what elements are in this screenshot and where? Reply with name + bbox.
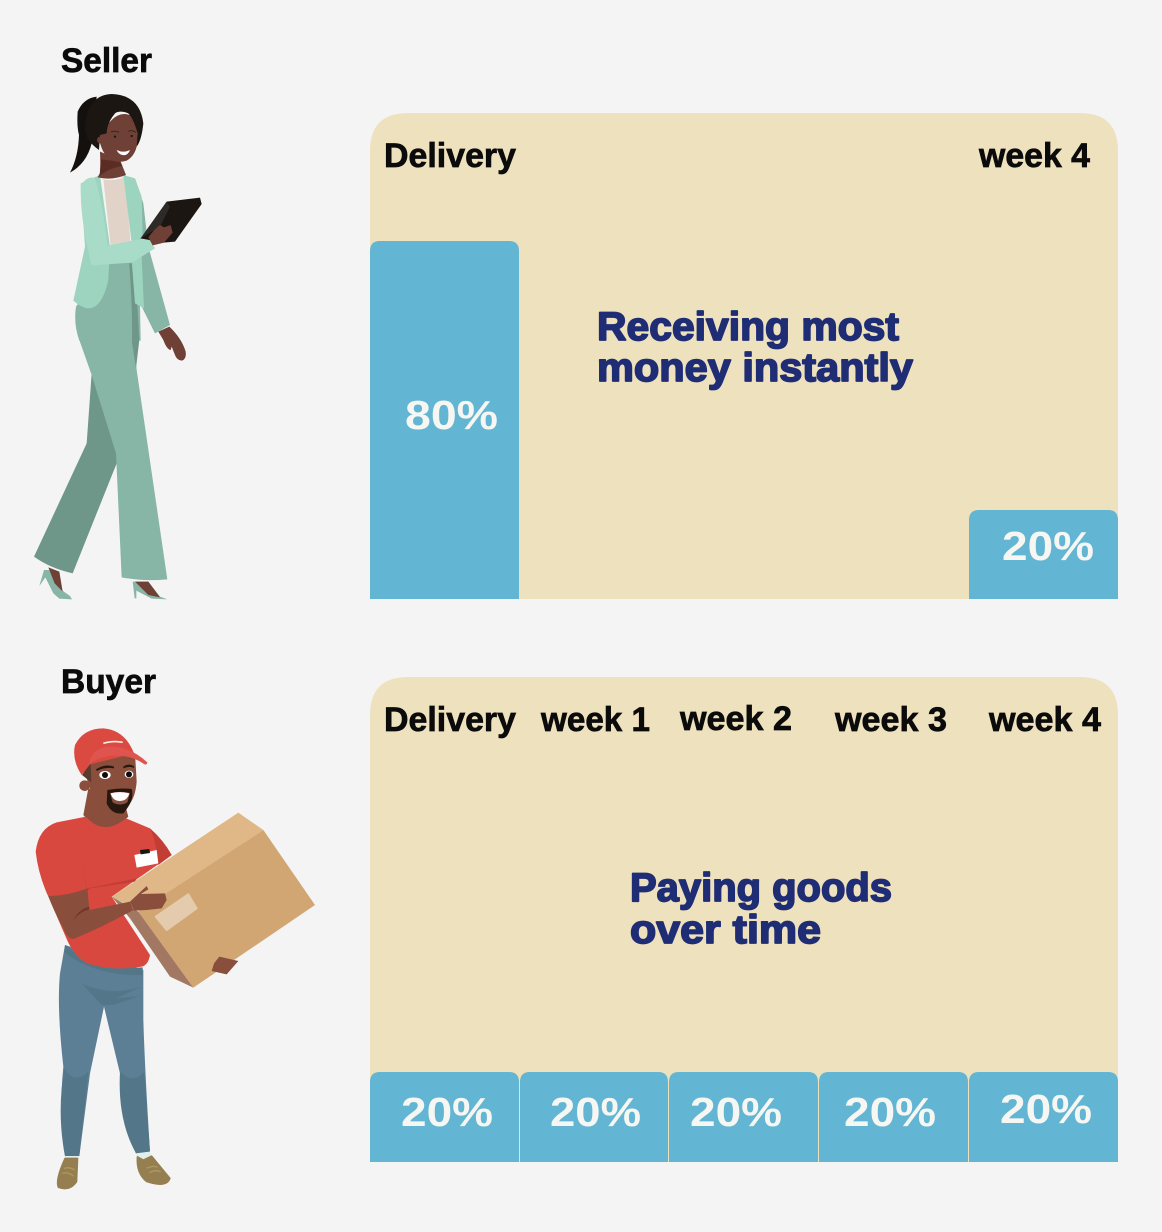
panel: seller payment timeline — [370, 113, 1118, 599]
heading: paying goods over time — [630, 866, 892, 952]
seller upper body — [73, 175, 202, 361]
buyer legs — [57, 945, 170, 1189]
label: week 1: week 1 — [540, 701, 650, 739]
seller legs — [34, 340, 167, 599]
bar: 20% week 3 — [819, 1072, 968, 1162]
bar: 20% on delivery — [370, 1072, 519, 1162]
heading: receiving most money instantly: money instantly — [597, 346, 914, 390]
heading: paying goods over time: Paying goods — [630, 866, 892, 910]
bar: 20% week 2: 20% — [690, 1089, 782, 1135]
seller head — [70, 94, 143, 179]
heading: Buyer: Buyer — [61, 663, 156, 701]
bar: 80% on delivery: 80% — [405, 392, 498, 438]
panel background — [370, 113, 1118, 599]
panel: buyer payment timeline — [370, 677, 1118, 1162]
bar: 20% week 2 — [669, 1072, 818, 1162]
heading: paying goods over time: over time — [630, 908, 821, 952]
bar: 20% week 1 — [520, 1072, 668, 1162]
bar: 20% week 3: 20% — [844, 1089, 936, 1135]
bar: 20% week 4 — [969, 1072, 1118, 1162]
bar: 20% week 4: 20% — [1000, 1086, 1092, 1132]
label: week 3: week 3 — [834, 701, 947, 739]
label: Delivery: Delivery — [384, 701, 516, 739]
buyer torso and box — [36, 788, 315, 988]
bar: 20% week 1: 20% — [550, 1089, 641, 1135]
buyer head — [74, 728, 147, 814]
bar: 20% on delivery: 20% — [401, 1089, 493, 1135]
heading: receiving most money instantly — [597, 305, 914, 390]
label: week 4: week 4 — [988, 701, 1101, 739]
panel background — [370, 677, 1118, 1162]
bar: 20% at week 4 — [969, 510, 1118, 599]
heading: Seller: Seller — [61, 42, 152, 80]
label: week 4: week 4 — [978, 137, 1090, 175]
bar: 20% at week 4: 20% — [1002, 523, 1094, 569]
label: week 2: week 2 — [679, 700, 792, 738]
label: Delivery: Delivery — [384, 137, 516, 175]
heading: receiving most money instantly: Receiving most — [597, 305, 899, 349]
illustration: buyer delivery man with box — [36, 728, 315, 1189]
illustration: seller woman with tablet — [34, 94, 202, 599]
buyer arm and hand — [48, 886, 167, 939]
bar: 80% on delivery — [370, 241, 519, 599]
